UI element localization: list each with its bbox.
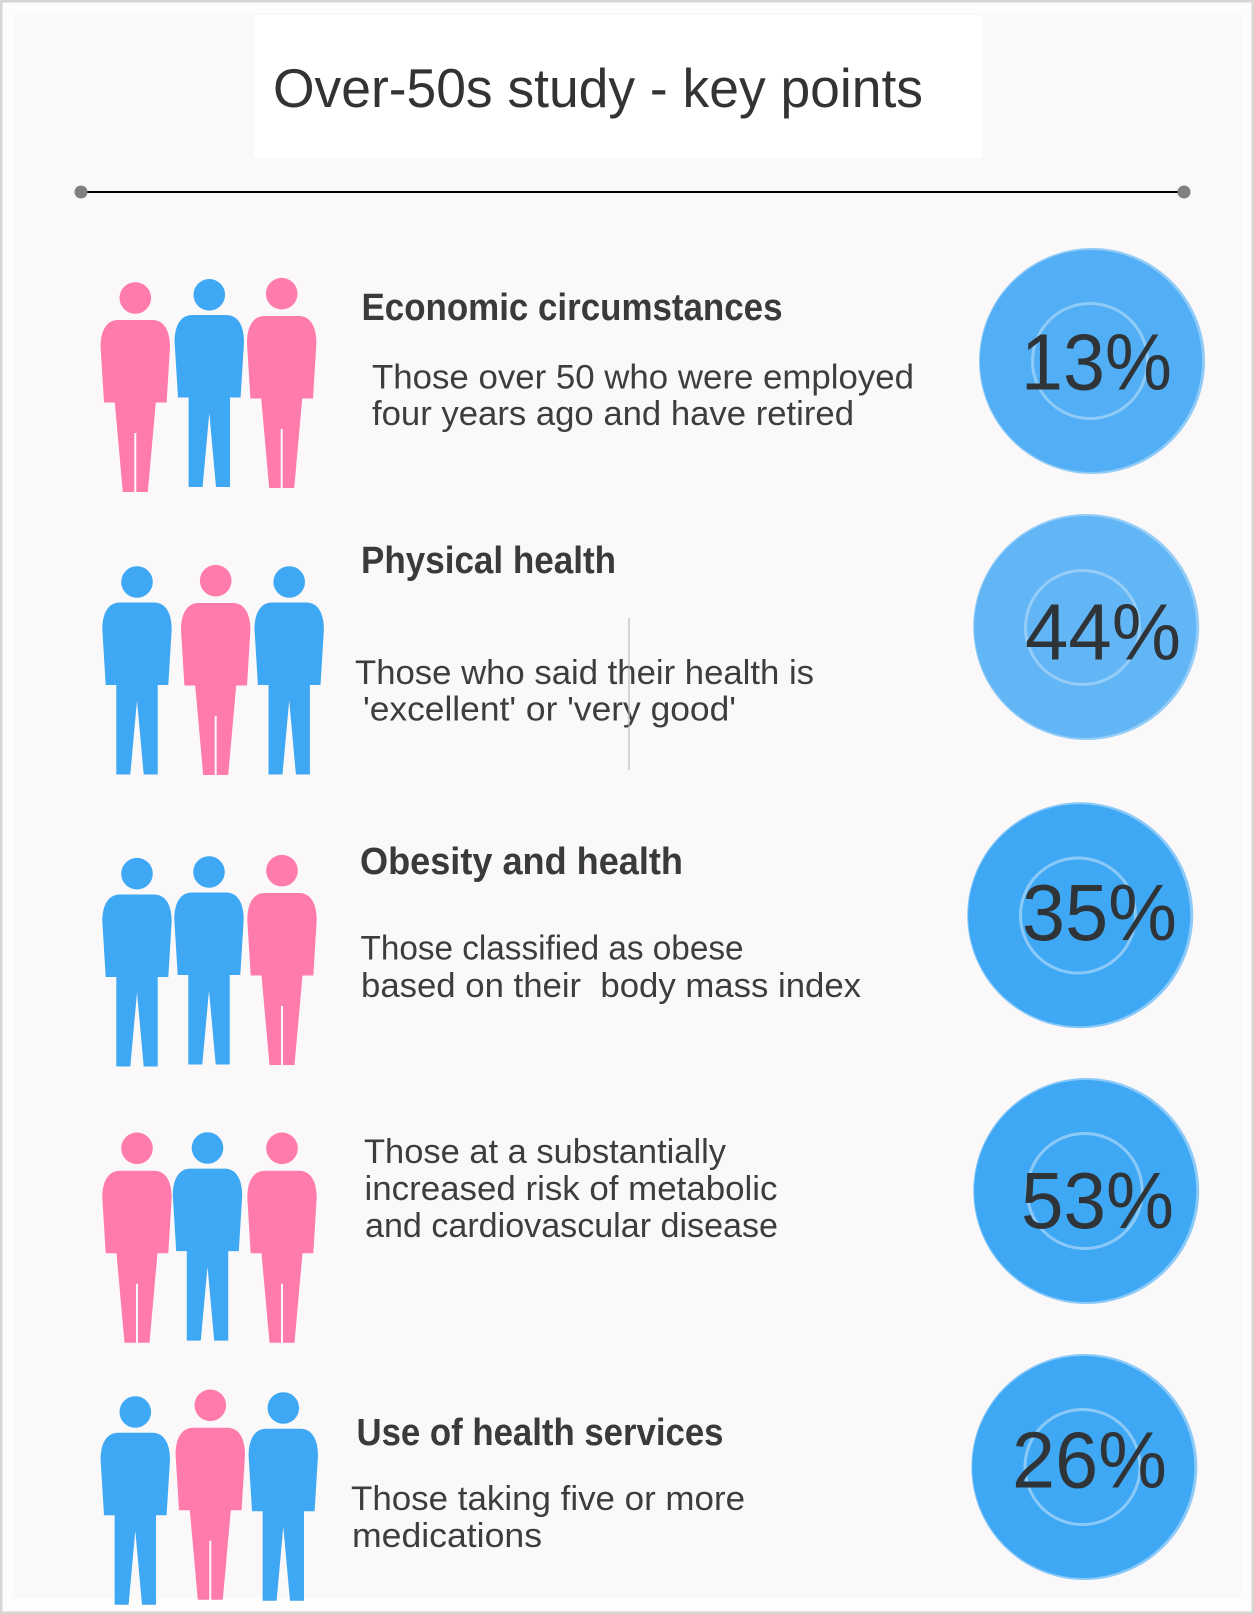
- description: based on their body mass index: [361, 967, 861, 1005]
- description: [351, 1480, 745, 1555]
- title: Over-50s study - key points: [273, 57, 923, 119]
- title: [254, 15, 983, 158]
- icon: three people: [102, 855, 317, 1066]
- description: Those taking five or more: [351, 1480, 745, 1518]
- heading: Physical health: [361, 540, 616, 582]
- description: Those over 50 who were employed: [372, 358, 914, 396]
- stat circle: 53%: [973, 1078, 1199, 1304]
- stat circle: 35%: 35%: [1022, 868, 1177, 957]
- stat circle: 44%: [973, 514, 1199, 740]
- description: and cardiovascular disease: [365, 1207, 778, 1245]
- icon: three people: [101, 278, 316, 492]
- stat circle: 26%: 26%: [1012, 1416, 1167, 1504]
- description: [360, 930, 861, 1005]
- heading: Economic circumstances: [362, 287, 782, 329]
- stat circle: 44%: 44%: [1025, 588, 1181, 676]
- divider line with end dots: [74, 186, 1190, 198]
- row: metabolic and cardiovascular risk: [102, 1078, 1199, 1343]
- heading: Obesity and health: [360, 841, 683, 883]
- stat circle: 13%: [979, 248, 1205, 474]
- description: four years ago and have retired: [372, 395, 854, 433]
- row: economic circumstances: [101, 248, 1205, 492]
- row: physical health: [102, 514, 1199, 775]
- heading: Use of health services: [356, 1412, 724, 1454]
- row: obesity and health: [102, 802, 1193, 1066]
- description: increased risk of metabolic: [364, 1170, 778, 1208]
- description: medications: [352, 1517, 542, 1555]
- stat circle: 13%: 13%: [1021, 318, 1172, 406]
- thin vertical rule: [628, 618, 630, 770]
- icon: three people: [102, 1132, 317, 1343]
- description: Those who said their health is: [355, 654, 814, 692]
- stat circle: 53%: 53%: [1021, 1156, 1174, 1245]
- description: [355, 654, 814, 728]
- description: [364, 1133, 778, 1245]
- stat circle: 26%: [971, 1354, 1197, 1580]
- stat circle: 35%: [967, 802, 1193, 1028]
- description: [372, 358, 914, 433]
- icon: three people: [102, 565, 324, 775]
- row: use of health services: [101, 1354, 1197, 1605]
- description: 'excellent' or 'very good': [363, 690, 736, 728]
- icon: three people: [101, 1390, 318, 1605]
- description: Those classified as obese: [360, 930, 744, 968]
- description: Those at a substantially: [364, 1133, 727, 1171]
